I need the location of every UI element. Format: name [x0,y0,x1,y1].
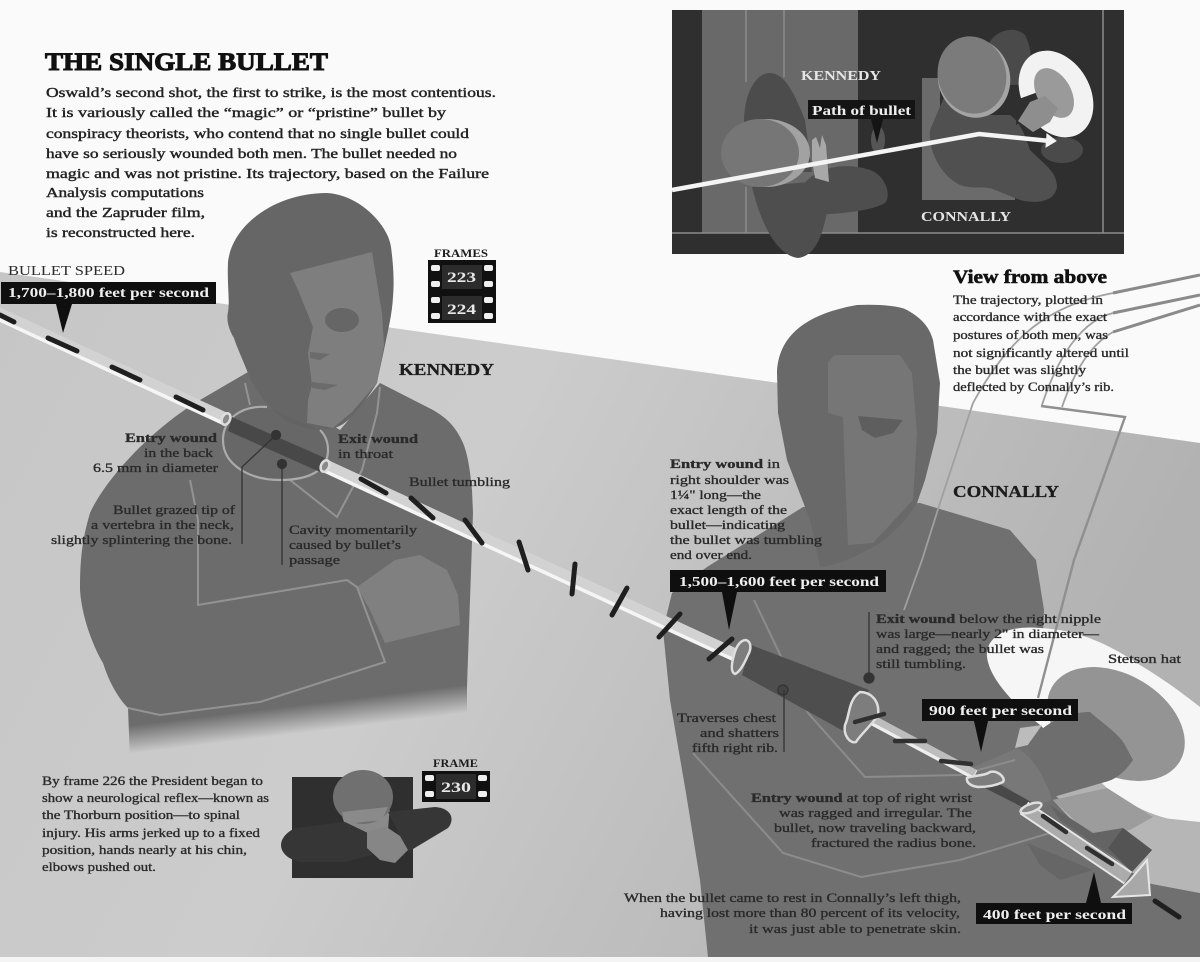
text: view from above [953,292,1129,394]
film frames 223 224: 223 [447,270,476,286]
top-view trajectory arrow [672,134,1056,190]
annotation: wrist entry wound [751,790,976,850]
annotation: cavity: caused by bullet’s [289,537,401,552]
text: view from above: The trajectory, plotted in [953,292,1104,307]
annotation: Kennedy exit wound [338,431,419,461]
head [929,30,1019,126]
speed callout 400: 400 feet per second [983,908,1126,923]
figure: Connally [663,305,1200,957]
callout path of bullet [808,100,915,143]
speed callout 1,500-1,600 [670,570,886,630]
caption: Thorburn position: injury. His arms jerked up to a fixed [42,825,261,840]
annotation: Connally exit wound [876,611,1101,671]
annotation: thigh [624,890,961,936]
annotation: thigh: When the bullet came to rest in Connally’s left thigh, [624,890,961,905]
annotation: Kennedy exit wound: Exit wound [338,431,419,446]
hat crown [1027,644,1200,804]
annotation: cavity: Cavity momentarily [289,522,418,537]
Kennedy seat [702,10,858,233]
arrow head [1113,860,1150,897]
annotation: rib: and shatters [700,725,779,740]
speed callout 1,700-1,800 [1,282,216,333]
label Connally: CONNALLY [921,209,1011,224]
annotation: Connally exit wound: and ragged; the bullet was [876,641,1044,656]
film frame 230: FRAME [433,758,478,770]
annotation: Kennedy entry wound: 6.5 mm in diameter [93,460,219,475]
annotation: wrist entry wound: bullet, now traveling backward, [774,820,976,835]
hat [1004,37,1108,151]
annotation: Connally shoulder entry wound: exact length of the [670,502,787,517]
inset: view from above diagram [672,10,1124,258]
view-from-above guide lines [904,275,1200,698]
bottom page edge [0,957,1200,962]
annotation: Connally shoulder entry wound: bullet—indicating [670,517,786,532]
caption: Thorburn position: show a neurological reflex—known as [42,790,269,805]
dark track through Connally wrist [983,783,1033,807]
bullet speed heading: BULLET SPEED [8,264,125,279]
annotation: Connally shoulder entry wound: 1¼" long—the [670,487,761,502]
annotation: cavity: passage [289,552,340,567]
Kennedy eye [325,308,359,332]
text: view from above: not significantly altered until [953,345,1129,360]
annotation: Connally shoulder entry wound: Entry wound in [670,456,781,471]
annotation: Connally shoulder entry wound: end over end. [670,547,752,562]
caption: Thorburn position: the Thorburn position—to spinal [42,807,240,822]
annotation: Kennedy exit wound: in throat [338,446,393,461]
film frames 223 224 [428,248,496,323]
annotation: vertebra [51,502,236,547]
intro text: have so seriously wounded both men. The bullet needed no [46,147,457,162]
speed callout 1,700-1,800: 1,700–1,800 feet per second [8,286,209,301]
hand [1028,712,1133,798]
text: view from above: deflected by Connally’s rib. [953,379,1114,394]
speed callout 900: 900 feet per second [929,704,1072,719]
leader: cavity [278,460,286,565]
top-view Connally [929,29,1108,202]
annotation: Kennedy entry wound: in the back [144,445,214,460]
intro text: magic and was not pristine. Its trajectory, based on the Failure [46,167,489,182]
annotation: vertebra: slightly splintering the bone. [51,532,232,547]
annotation: Connally exit wound: still tumbling. [876,656,966,671]
neck ring [223,407,328,480]
leader: rib [778,685,788,752]
annotation: wrist entry wound: was ragged and irregular. The [779,805,972,820]
tumbling bullets [0,315,1179,917]
muted bullets inside Connally [855,714,1112,864]
intro text: Oswald’s second shot, the first to strike, is the most contentious. [46,86,496,101]
annotation: wrist entry wound: fractured the radius bone. [811,835,976,850]
annotation: thigh: having lost more than 80 percent of its velocity, [660,905,960,920]
title: THE SINGLE BULLET [45,49,328,76]
film frames 223 224: FRAMES [434,248,488,260]
annotation: Connally exit wound: was large—nearly 2" in diameter— [876,626,1100,641]
Stetson hat [987,627,1200,822]
label Kennedy: KENNEDY [399,360,494,379]
intro text: is reconstructed here. [46,226,195,241]
Kennedy hand [357,555,460,643]
torso [752,180,832,258]
Connally clothing lines [693,600,1050,877]
heading: view from above: View from above [953,267,1107,288]
Connally eye [858,416,903,438]
annotation: Connally shoulder entry wound: right shoulder was [670,472,789,487]
speed callout 400 [976,872,1132,924]
path strips [0,311,1128,878]
Connally face [828,355,917,545]
intro text: conspiracy theorists, who contend that no single bullet could [46,127,469,142]
annotation: wrist entry wound: Entry wound at top of right wrist [751,790,972,805]
Kennedy face [290,252,384,428]
dark track through Connally chest [742,645,869,733]
crown [1026,61,1082,125]
light panel below hat [1053,788,1200,893]
annotation: vertebra: a vertebra in the neck, [91,517,234,532]
annotation: Kennedy entry wound [93,430,219,475]
figure: frame 230 Kennedy [281,770,452,878]
annotation: Connally exit wound: Exit wound below the right nipple [876,611,1101,626]
back and hair [744,73,812,172]
intro text: It is variously called the “magic” or “pristine” bullet by [46,106,446,121]
seat lines [672,10,1124,233]
wound outlines [220,412,1043,816]
dark track through Kennedy [228,417,325,472]
right blob [1041,137,1083,163]
intro text: Analysis computations [46,186,204,201]
annotation: bullet tumbling: Bullet tumbling [409,474,511,489]
annotation: Connally shoulder entry wound: the bullet was tumbling [670,532,823,547]
callout path of bullet: Path of bullet [812,104,911,119]
caption: Thorburn position: By frame 226 the President began to [42,773,263,788]
speed callout 1,500-1,600: 1,500–1,600 feet per second [679,575,879,590]
text: view from above: accordance with the exact [953,309,1107,324]
intro text: and the Zapruder film, [46,206,205,221]
film frame 230 [422,758,490,802]
wedge beside hand [1015,725,1042,748]
Kennedy clothing lines [128,383,385,715]
annotation: Connally shoulder entry wound [670,456,823,562]
lighter palm [1053,788,1153,835]
leader: exit wound [864,612,874,683]
annotation: rib [677,710,779,755]
annotation: vertebra: Bullet grazed tip of [113,502,236,517]
head [722,119,810,187]
Kennedy head [227,193,394,430]
annotation: cavity [289,522,418,567]
body [930,95,1057,202]
text: view from above: the bullet was slightly [953,362,1087,377]
intro text [46,86,496,241]
arm [800,166,888,215]
figure: Kennedy [80,193,473,760]
annotation: rib: fifth right rib. [692,740,778,755]
forearm [967,748,1052,807]
bullet path [0,311,1179,917]
upper dark shape [988,30,1031,85]
Connally head [777,305,940,567]
label Kennedy: KENNEDY [801,68,881,83]
hands [812,135,829,182]
notch [1016,92,1040,125]
hat brim [987,627,1200,822]
Kennedy nose and mouth shadows [310,352,338,390]
hand [1018,96,1058,132]
caption: Thorburn position [42,773,269,874]
background floor [0,272,1200,957]
film frames 223 224: 224 [447,302,477,318]
annotation: thigh: it was just able to penetrate skin. [749,921,961,936]
speed callout 900 [922,699,1078,752]
top-view Kennedy [721,73,888,258]
caption: Thorburn position: position, hands nearly at his chin, [42,842,247,857]
label Connally: CONNALLY [953,482,1059,501]
Connally seat [922,78,1015,200]
dark sleeve [1050,805,1152,872]
label Stetson hat: Stetson hat [1108,651,1181,666]
Kennedy body [80,372,473,760]
film frame 230: 230 [441,780,471,796]
text: view from above: postures of both men, was [953,327,1108,342]
leader: vertebra [242,430,280,544]
Connally body [663,503,1200,957]
lower thigh shading [1027,843,1093,880]
annotation: rib: Traverses chest [677,710,776,725]
annotation: Kennedy entry wound: Entry wound [125,430,218,445]
caption: Thorburn position: elbows pushed out. [42,859,156,874]
